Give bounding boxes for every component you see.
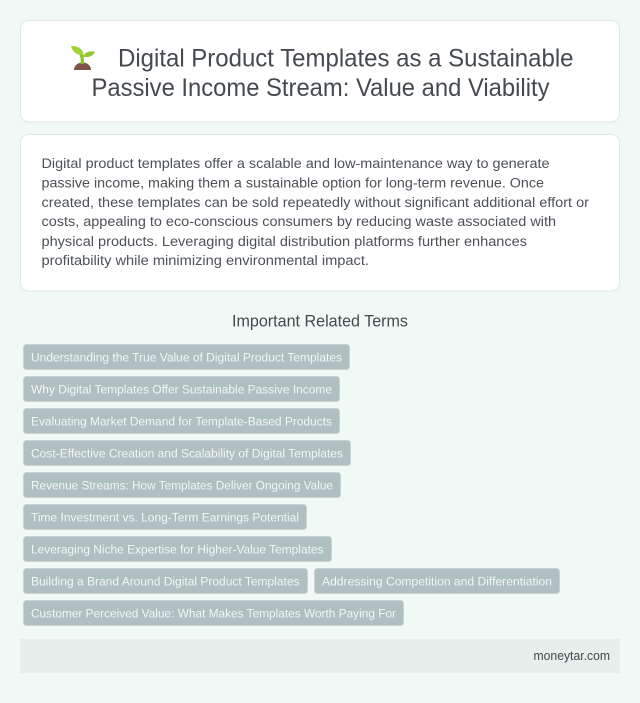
- tag 3: [24, 408, 340, 434]
- paragraph text: physical products. Leveraging digital distribution platforms further enhances: [42, 234, 527, 250]
- title text: Digital Product Templates as a Sustainable: [118, 46, 574, 72]
- tag 7: [24, 536, 332, 562]
- footer source text: moneytar.com: [534, 648, 610, 663]
- tag list: [24, 344, 560, 626]
- tag 10: Customer Perceived Value: What Makes Templates Worth Paying For: [31, 606, 396, 620]
- tag 2: [24, 376, 340, 402]
- tag 1: Understanding the True Value of Digital Product Templates: [31, 350, 342, 364]
- heading: important related terms: Important Related Terms: [232, 312, 408, 330]
- tag 9: [314, 568, 560, 594]
- tag 3: Evaluating Market Demand for Template-Based Products: [31, 414, 332, 428]
- paragraph text: passive income, making them a sustainable option for long-term revenue. Once: [42, 175, 544, 191]
- paragraph text: costs, appealing to eco-conscious consumers by reducing waste associated with: [42, 214, 556, 230]
- icon: sprout: [71, 46, 95, 70]
- paragraph text: [42, 156, 589, 269]
- title text: [92, 46, 574, 102]
- title text: Passive Income Stream: Value and Viability: [92, 75, 550, 102]
- panel: title header: [20, 20, 620, 122]
- tag 5: [24, 472, 340, 498]
- tag 6: [24, 504, 306, 530]
- tag 2: Why Digital Templates Offer Sustainable Passive Income: [31, 382, 332, 396]
- tag 8: [24, 568, 308, 594]
- tag 4: Cost-Effective Creation and Scalability of Digital Templates: [31, 446, 343, 460]
- panel: summary paragraph: [20, 134, 620, 291]
- tag 5: Revenue Streams: How Templates Deliver Ongoing Value: [31, 478, 333, 492]
- tag 9: Addressing Competition and Differentiation: [322, 574, 552, 588]
- tag 7: Leveraging Niche Expertise for Higher-Value Templates: [31, 542, 324, 556]
- tag 6: Time Investment vs. Long-Term Earnings Potential: [31, 510, 299, 524]
- paragraph text: Digital product templates offer a scalable and low-maintenance way to generate: [42, 156, 550, 172]
- tag 4: [24, 440, 350, 466]
- footer bar: [20, 639, 620, 673]
- tag 8: Building a Brand Around Digital Product Templates: [31, 574, 300, 588]
- paragraph text: profitability while minimizing environmental impact.: [42, 253, 369, 269]
- tag 10: [24, 600, 404, 626]
- paragraph text: created, these templates can be sold repeatedly without significant additional effort or: [42, 195, 589, 211]
- tag 1: [24, 344, 350, 370]
